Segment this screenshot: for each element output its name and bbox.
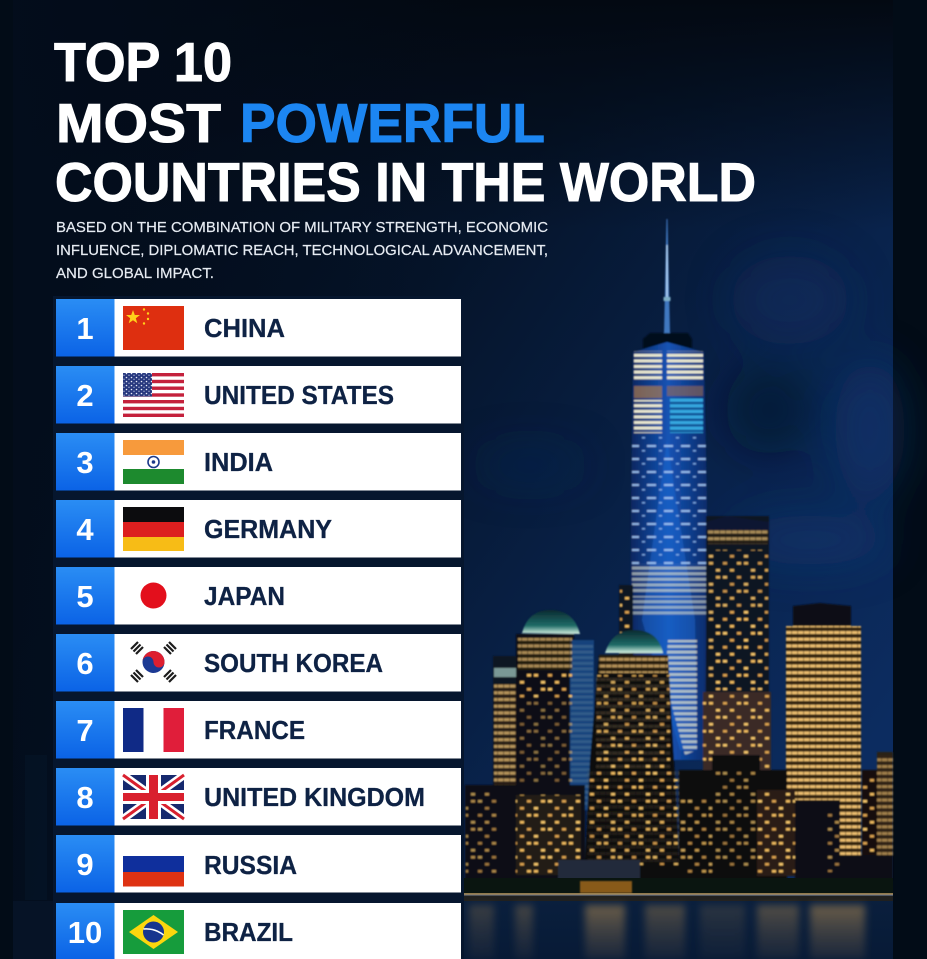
- dome building 2: [584, 655, 680, 880]
- row 5: Japan: JAPAN: [204, 581, 285, 611]
- row 7: France: [56, 701, 461, 758]
- title: TOP 10: [54, 31, 232, 93]
- row 1: China: CHINA: [204, 313, 285, 343]
- row 3: India: [56, 433, 461, 490]
- row 9: Russia: RUSSIA: [204, 850, 297, 880]
- row 3: India: INDIA: [204, 447, 273, 477]
- clouds: [475, 255, 905, 565]
- low-rise row: [465, 785, 585, 880]
- row 8: United Kingdom: 8: [76, 780, 94, 815]
- icon: flag of South Korea: [131, 642, 176, 682]
- icon: flag of France: [123, 708, 184, 752]
- spire: [664, 219, 670, 333]
- small gold left: [493, 656, 517, 786]
- row 2: United States: UNITED STATES: [204, 380, 394, 410]
- one world trade tower: [630, 342, 707, 760]
- subtitle text block: BASED ON THE COMBINATION OF MILITARY STRENGTH, ECONOMIC: [56, 219, 548, 236]
- row 7: France: FRANCE: [204, 715, 305, 745]
- skyline: [465, 219, 893, 882]
- title: COUNTRIES IN THE WORLD: [55, 151, 756, 213]
- row 10: Brazil: [56, 903, 461, 959]
- title: [54, 31, 756, 213]
- dome building 1: [516, 634, 574, 814]
- row 5: Japan: [56, 567, 461, 624]
- row 4: Germany: [56, 500, 461, 558]
- icon: flag of China: [123, 306, 184, 350]
- icon: flag of Germany: [123, 507, 184, 551]
- icon: flag of Japan: [123, 574, 184, 618]
- subtitle text block: AND GLOBAL IMPACT.: [56, 265, 214, 282]
- icon: flag of Brazil: [123, 910, 184, 954]
- row 6: South Korea: 6: [76, 646, 94, 681]
- subtitle text block: INFLUENCE, DIPLOMATIC REACH, TECHNOLOGICAL ADVANCEMENT,: [56, 242, 548, 259]
- row 8: United Kingdom: UNITED KINGDOM: [204, 782, 425, 812]
- row 2: United States: [56, 366, 461, 424]
- shoreline trees and lights: [463, 878, 893, 894]
- row 7: France: 7: [76, 713, 94, 748]
- title: POWERFUL: [240, 92, 545, 154]
- row 6: South Korea: [56, 634, 461, 692]
- icon: flag of United Kingdom: [123, 775, 184, 819]
- row 10: Brazil: 10: [68, 915, 102, 950]
- row 6: South Korea: SOUTH KOREA: [204, 648, 383, 678]
- row 1: China: 1: [76, 311, 94, 346]
- row 9: Russia: [56, 835, 461, 892]
- row 9: Russia: 9: [76, 847, 94, 882]
- icon: flag of India: [123, 440, 184, 484]
- row 3: India: 3: [76, 445, 94, 480]
- row 8: United Kingdom: [56, 768, 461, 826]
- row 2: United States: 2: [76, 378, 94, 413]
- row 1: China: [56, 299, 461, 356]
- subtitle text block: [56, 219, 548, 282]
- icon: flag of Russia: [123, 842, 184, 886]
- gold tower: [793, 603, 851, 626]
- row 10: Brazil: BRAZIL: [204, 917, 293, 947]
- row 5: Japan: 5: [76, 579, 94, 614]
- row 4: Germany: 4: [76, 512, 94, 547]
- title: MOST: [56, 92, 221, 154]
- dark tower annex: [619, 585, 633, 665]
- row 4: Germany: GERMANY: [204, 514, 332, 544]
- icon: flag of United States: [123, 373, 184, 417]
- ranking list: [53, 296, 464, 959]
- tower right: [706, 516, 769, 696]
- water with reflections: [463, 901, 893, 959]
- right small buildings: [862, 770, 878, 860]
- tower cap: [643, 333, 692, 350]
